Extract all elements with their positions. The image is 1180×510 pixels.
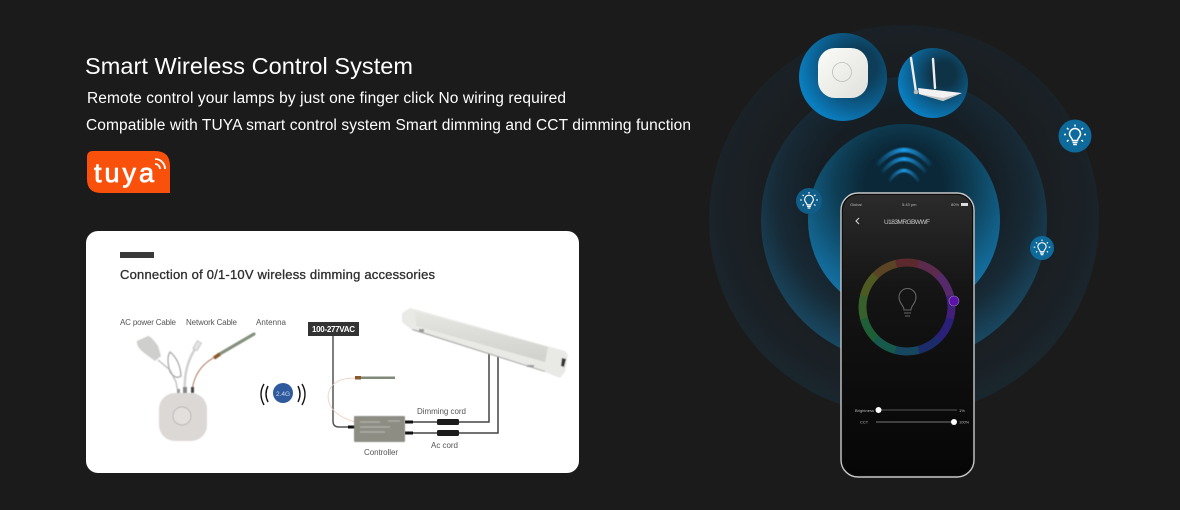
- bulb glyph: [899, 288, 916, 316]
- label: AC power cable: AC power Cable: [120, 318, 177, 327]
- status bar: Global: [850, 202, 862, 207]
- illustration: hub with cables: [137, 334, 254, 441]
- icon: wifi arcs: [877, 150, 931, 181]
- phone: [841, 193, 974, 477]
- panel: wiring diagram: [86, 231, 579, 473]
- icon: tuya logo: tuya: [94, 158, 155, 188]
- CCT slider: CCT: [860, 420, 869, 424]
- illustration: LED batten lamp: [402, 308, 568, 378]
- text block: description line 1: Remote control your lamps by just one finger click No wiring required: [87, 90, 566, 107]
- icon: router badge: [898, 48, 968, 118]
- brightness slider: [855, 407, 965, 413]
- icon: 2.4G wireless signal: [261, 383, 305, 405]
- icon: bulb badge right: [1058, 120, 1092, 152]
- icon: tuya logo: [87, 151, 170, 193]
- title: Smart Wireless Control System: [85, 53, 413, 79]
- colour wheel knob: [949, 296, 959, 306]
- phone screen: [843, 195, 972, 475]
- CCT slider: [860, 419, 970, 425]
- label: ac cord: Ac cord: [431, 441, 458, 450]
- brightness slider: 1%: [959, 408, 965, 413]
- illustration: wiring: [328, 336, 498, 433]
- illustration: connectors: [437, 419, 459, 436]
- heading bar: [120, 252, 154, 258]
- label: network cable: Network Cable: [186, 318, 238, 327]
- status bar: [850, 202, 968, 207]
- chart: signal rings: [709, 25, 1099, 415]
- label: antenna: Antenna: [256, 318, 287, 327]
- status bar: 80%: [951, 202, 959, 207]
- icon: bulb badge lower right: [1030, 236, 1054, 260]
- icon: 2.4G wireless signal: 2.4G: [276, 391, 290, 398]
- status bar: 5:43 pm: [902, 202, 917, 207]
- label: 100-277VAC: [308, 322, 359, 336]
- label: controller: Controller: [364, 448, 398, 457]
- illustration: controller: [354, 416, 405, 442]
- back arrow: [856, 218, 859, 224]
- label: 100-277VAC: 100-277VAC: [312, 325, 355, 334]
- CCT slider: 100%: [959, 420, 970, 424]
- icon: hub badge: [799, 33, 887, 121]
- text block: description line 2: Compatible with TUYA smart control system Smart dimming and CCT dimming function: [86, 117, 691, 134]
- panel heading: Connection of 0/1-10V wireless dimming accessories: [120, 267, 436, 282]
- icon: bulb badge left: [796, 188, 822, 214]
- device name: U183MRGBWWF: [884, 219, 930, 226]
- colour wheel: [844, 244, 970, 370]
- brightness slider: Brightness: [855, 408, 874, 413]
- label: dimming cord: Dimming cord: [417, 407, 466, 416]
- illustration: antenna: [355, 376, 395, 380]
